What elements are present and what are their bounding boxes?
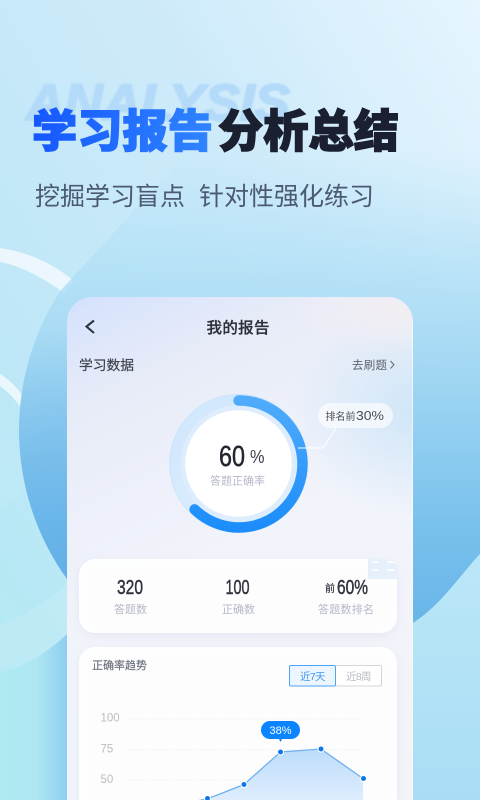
y axis and grid: 75	[100, 744, 113, 756]
ring value	[220, 446, 264, 466]
ring value: 60	[219, 441, 245, 473]
tooltip: 38%: 38%	[269, 725, 292, 737]
lower-right light wedge	[413, 554, 480, 800]
stat: ranking: 前	[325, 582, 335, 595]
y axis and grid: 100	[100, 712, 120, 724]
ring caption: 答题正确率	[210, 474, 265, 488]
watermark word: ANALYSIS	[24, 74, 290, 131]
screen title: 我的报告	[206, 319, 270, 337]
trend heading: 正确率趋势	[92, 658, 147, 672]
y axis and grid: 50	[100, 774, 113, 786]
y axis and grid	[100, 712, 362, 786]
line chart	[198, 746, 366, 800]
chart: accuracy ring	[170, 394, 308, 532]
lower-left light panel	[0, 634, 67, 800]
callout: rank top 30%	[298, 403, 393, 448]
link: go practice: 去刷题	[352, 359, 388, 372]
panel: phone card	[67, 297, 413, 800]
sticker mark in corner	[368, 559, 397, 579]
stat: ranking	[318, 580, 372, 614]
progress arc	[195, 400, 302, 527]
ring value: %	[250, 447, 264, 467]
icon: back chevron	[86, 320, 94, 333]
toggle: last 7 days	[290, 666, 336, 686]
stat: ranking: 答题数排名	[318, 602, 374, 616]
panel: summary stats	[79, 559, 397, 633]
stat: correct answers: 正确数	[222, 603, 255, 616]
title: blue part: 学习报告	[32, 106, 213, 157]
large background orb	[19, 150, 480, 800]
stat: ranking: 60%	[337, 577, 368, 599]
stat: questions answered	[114, 580, 146, 614]
callout: rank top 30%: 排名前	[326, 410, 356, 423]
toggle: last 8 weeks	[336, 666, 382, 686]
stat: correct answers: 100	[226, 577, 250, 599]
tooltip: 38%	[261, 721, 300, 742]
title	[32, 106, 399, 157]
stat: questions answered: 320	[117, 577, 143, 599]
subtitle: 挖掘学习盲点 针对性强化练习	[35, 183, 374, 211]
title: dark part: 分析总结	[218, 106, 399, 157]
stat: questions answered: 答题数	[114, 602, 147, 616]
decorative rings on the left	[0, 248, 74, 672]
toggle: last 8 weeks: 近8周	[346, 670, 372, 683]
callout: rank top 30%: 30%	[356, 408, 384, 423]
toggle: last 7 days: 近7天	[300, 670, 326, 683]
stat: correct answers	[222, 580, 254, 614]
panel: accuracy trend	[79, 647, 397, 800]
link: go practice	[352, 359, 395, 370]
section heading: study data: 学习数据	[79, 358, 134, 373]
